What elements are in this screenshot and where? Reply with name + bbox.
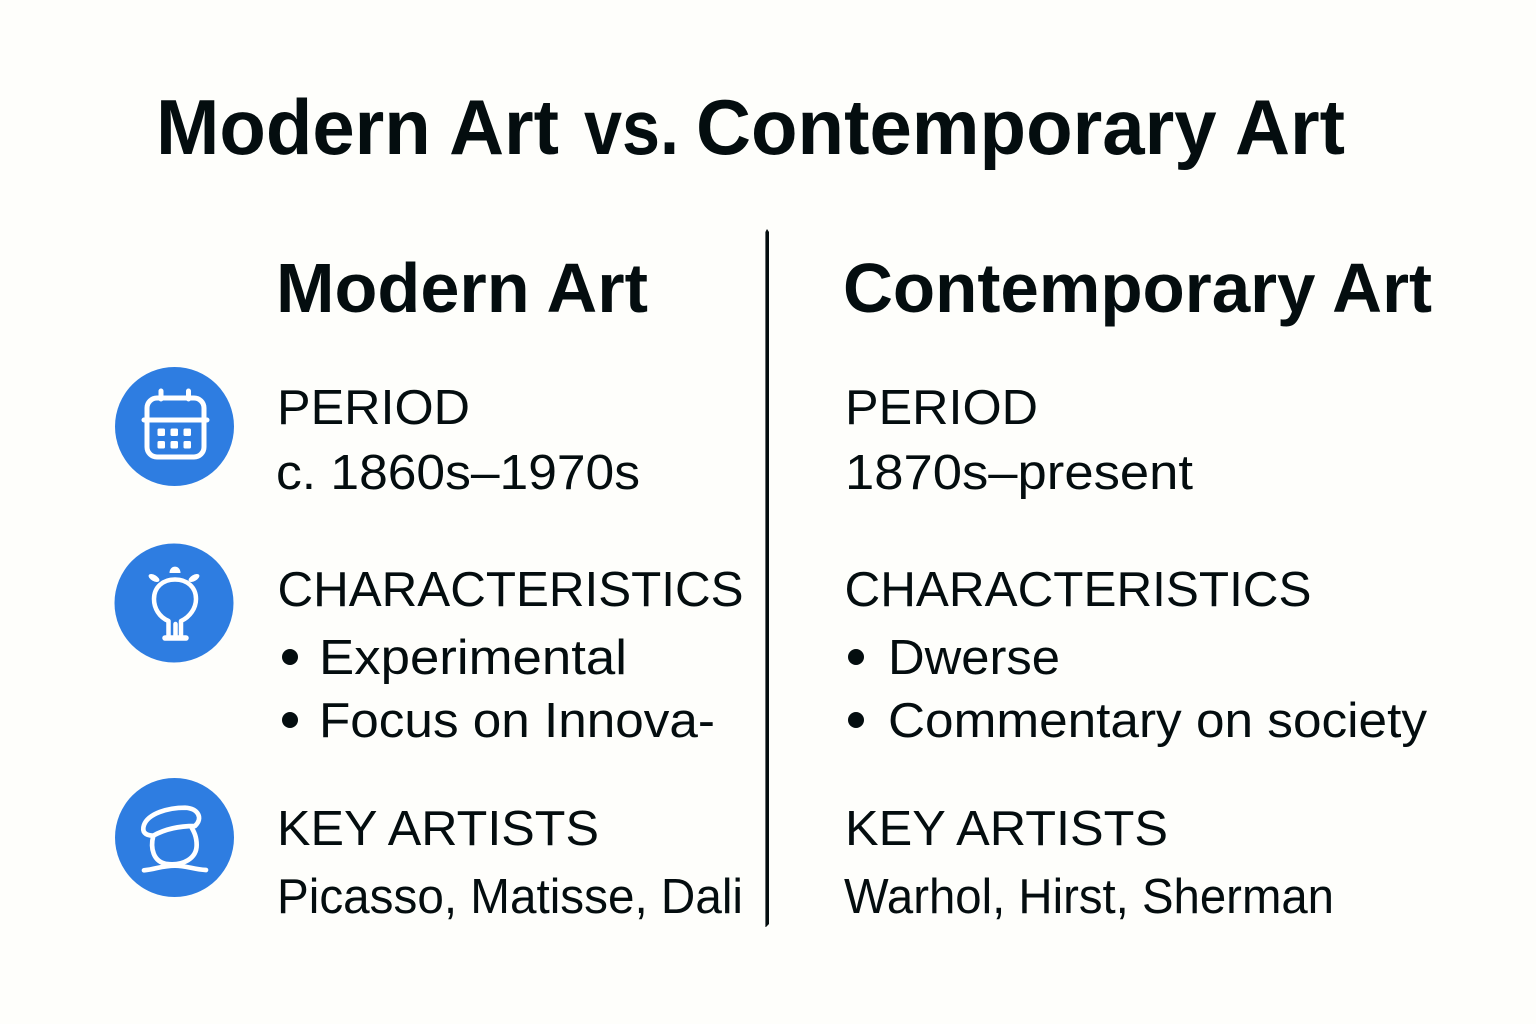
- text block: modern key artists: [277, 802, 743, 924]
- title: vs.: [584, 83, 679, 171]
- icon: artist: [115, 778, 234, 897]
- text block: modern key artists: Picasso, Matisse, Dali: [277, 870, 743, 924]
- heading: contemporary art: Contemporary Art: [843, 249, 1432, 327]
- text block: contemporary characteristics: [844, 563, 1428, 748]
- text block: modern key artists: KEY ARTISTS: [277, 802, 599, 856]
- text block: contemporary period: 1870s–present: [845, 446, 1193, 500]
- bullet: commentary on society: Commentary on society: [888, 694, 1428, 748]
- divider line between columns: [765, 229, 769, 927]
- characteristics label: CHARACTERISTICS: [278, 563, 744, 617]
- text block: modern period: PERIOD: [277, 381, 470, 435]
- panel: modern art: [114, 249, 744, 924]
- title: [156, 83, 1345, 171]
- title: Contemporary Art: [696, 83, 1345, 171]
- icon: light bulb: [114, 544, 234, 662]
- panel: contemporary art: [843, 249, 1432, 924]
- text block: contemporary key artists: [844, 802, 1334, 924]
- title: Modern Art: [156, 83, 559, 171]
- text block: contemporary period: PERIOD: [845, 381, 1038, 435]
- icon: calendar: [115, 367, 234, 486]
- bullet: focus on innovation: Focus on Innova-: [319, 694, 715, 748]
- heading: modern art: Modern Art: [276, 249, 648, 327]
- text block: contemporary key artists: Warhol, Hirst, Sherman: [844, 870, 1334, 924]
- bullet: experimental: Experimental: [319, 631, 627, 685]
- text block: contemporary key artists: KEY ARTISTS: [845, 802, 1168, 856]
- bullet: diverse: Dwerse: [888, 631, 1060, 685]
- text block: modern characteristics: [278, 563, 744, 748]
- characteristics label: CHARACTERISTICS: [844, 563, 1312, 617]
- text block: modern period: c. 1860s–1970s: [276, 446, 640, 500]
- text block: contemporary period: [845, 381, 1193, 500]
- text block: modern period: [276, 381, 640, 500]
